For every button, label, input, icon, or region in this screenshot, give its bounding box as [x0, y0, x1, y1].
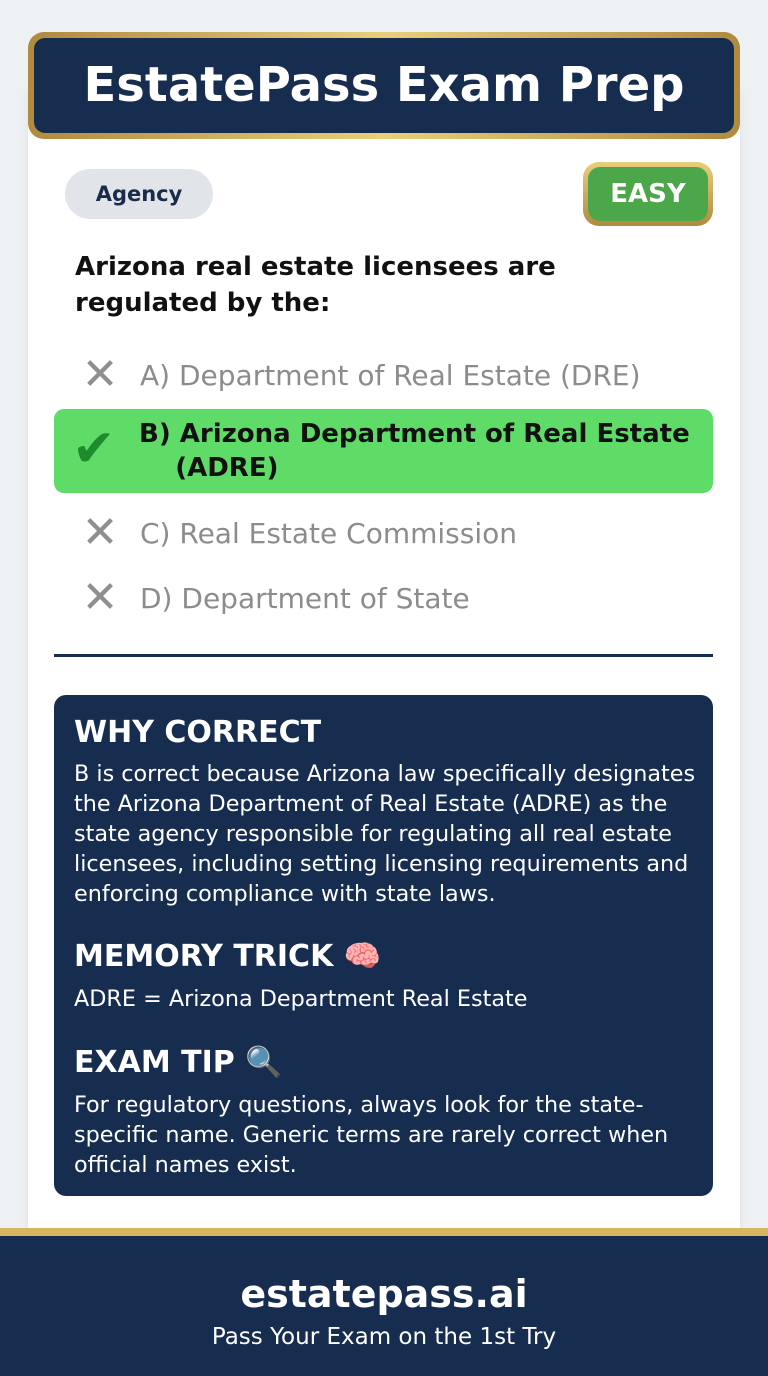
option B correct: B) Arizona Department of Real Estate [139, 419, 690, 449]
option C [82, 507, 517, 558]
explanation panel [54, 695, 713, 1196]
option C: ✕ [82, 507, 118, 558]
difficulty badge: EASY [610, 179, 686, 209]
option B correct: (ADRE) [175, 453, 278, 483]
exam tip text: For regulatory questions, always look for the state- [74, 1092, 644, 1118]
question: regulated by the: [75, 288, 330, 318]
header banner [28, 32, 740, 139]
category pill [65, 169, 213, 219]
card [28, 90, 740, 1230]
icon: check: ✔ [72, 419, 116, 479]
header banner: EstatePass Exam Prep [84, 57, 684, 113]
option C: C) Real Estate Commission [140, 516, 517, 550]
why correct text: enforcing compliance with state laws. [74, 881, 496, 907]
option B correct [54, 409, 713, 493]
why correct text: state agency responsible for regulating all real estate [74, 821, 672, 847]
footer brand: estatepass.ai [240, 1272, 528, 1316]
heading: why correct: WHY CORRECT [74, 715, 321, 750]
why correct text: B is correct because Arizona law specifically designates [74, 761, 695, 787]
memory trick text: ADRE = Arizona Department Real Estate [74, 986, 527, 1012]
footer tagline: Pass Your Exam on the 1st Try [212, 1324, 556, 1350]
exam tip text: specific name. Generic terms are rarely correct when [74, 1122, 668, 1148]
exam tip text: official names exist. [74, 1152, 297, 1178]
option D: D) Department of State [140, 582, 470, 614]
why correct text: licensees, including setting licensing requirements and [74, 851, 688, 877]
heading: memory trick: MEMORY TRICK 🧠 [74, 939, 381, 974]
option A: ✕ [82, 349, 118, 400]
exam tip text [74, 1092, 668, 1178]
why correct text: the Arizona Department of Real Estate (ADRE) as the [74, 791, 667, 817]
heading: exam tip: EXAM TIP 🔍 [74, 1045, 283, 1080]
option A: A) Department of Real Estate (DRE) [140, 358, 641, 392]
why correct text [74, 761, 695, 907]
category pill: Agency [96, 182, 182, 206]
footer [0, 1228, 768, 1376]
option D: ✕ [82, 572, 118, 623]
option A [82, 349, 641, 400]
question: Arizona real estate licensees are [75, 252, 556, 282]
option D [82, 572, 470, 623]
difficulty badge [583, 162, 713, 226]
question [75, 252, 556, 318]
